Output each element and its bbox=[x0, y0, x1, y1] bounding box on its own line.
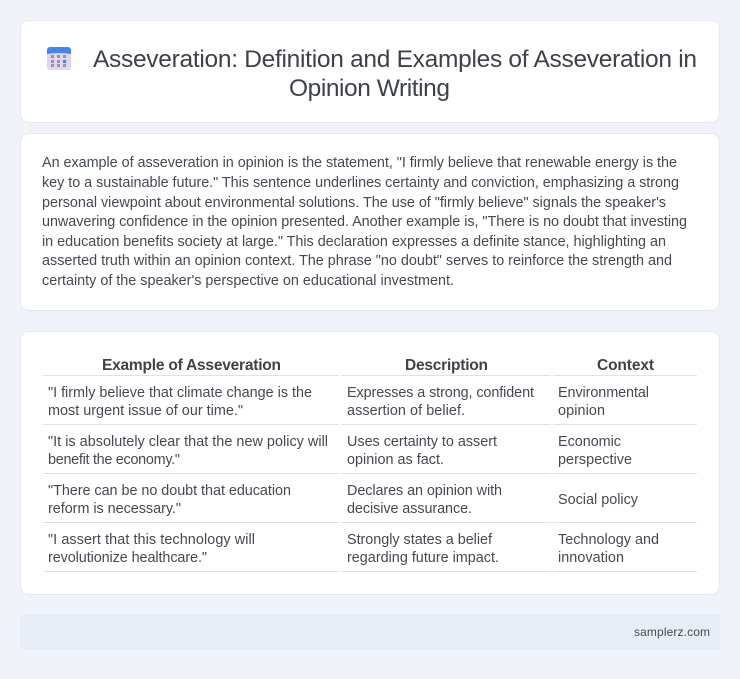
table row 2: "It is absolutely clear that the new policy will bbox=[48, 434, 328, 450]
table header bbox=[102, 357, 654, 374]
table row 1: "I firmly believe that climate change is the bbox=[48, 385, 312, 401]
table row 4: innovation bbox=[558, 550, 624, 566]
text block: paragraph bbox=[42, 155, 687, 289]
text block: paragraph: key to a sustainable future." This sentence underlines certainty and conviction, emphasizing a strong bbox=[42, 175, 679, 191]
heading: Asseveration: Definition and Examples of Asseveration in bbox=[93, 46, 697, 73]
table row 2: perspective bbox=[558, 452, 632, 468]
table row 1: Expresses a strong, confident bbox=[347, 385, 534, 401]
text block: paragraph: asserted truth within an opinion context. The phrase "no doubt" serves to reinforce the strength and bbox=[42, 253, 672, 269]
table row 3 bbox=[48, 483, 639, 517]
heading bbox=[93, 46, 697, 102]
table header: Context bbox=[597, 357, 654, 374]
text block: paragraph: An example of asseveration in opinion is the statement, "I firmly believe that renewable energy is the bbox=[42, 155, 677, 171]
text block: paragraph: personal viewpoint about environmental solutions. The use of "firmly believe" signals the speaker's bbox=[42, 195, 666, 211]
table row 1: most urgent issue of our time." bbox=[48, 403, 243, 419]
table row 3: Declares an opinion with bbox=[347, 483, 502, 499]
text block: paragraph: in education benefits society at large." This declaration expresses a definite stance, highlighting an bbox=[42, 234, 666, 250]
table header: Description bbox=[405, 357, 488, 374]
table row 2: opinion as fact. bbox=[347, 452, 444, 468]
table row 3: decisive assurance. bbox=[347, 501, 472, 517]
table row 3: "There can be no doubt that education bbox=[48, 483, 291, 499]
table row 2: benefit the economy." bbox=[48, 452, 180, 468]
panel: introduction text bbox=[20, 134, 720, 310]
table row 4: revolutionize healthcare." bbox=[48, 550, 207, 566]
table row 4: Strongly states a belief bbox=[347, 532, 493, 548]
panel: title card bbox=[20, 20, 720, 122]
table row 1 bbox=[48, 385, 649, 419]
table row 3: reform is necessary." bbox=[48, 501, 181, 517]
table header: Example of Asseveration bbox=[102, 357, 281, 374]
footer bar: samplerz.com bbox=[634, 625, 710, 639]
table row 4: "I assert that this technology will bbox=[48, 532, 255, 548]
table row 1: assertion of belief. bbox=[347, 403, 465, 419]
icon: calendar bbox=[47, 47, 71, 70]
heading: Opinion Writing bbox=[289, 75, 450, 102]
text block: paragraph: certainty of the speaker's perspective on educational investment. bbox=[42, 273, 454, 289]
table row 4: Technology and bbox=[558, 532, 659, 548]
table row 4: regarding future impact. bbox=[347, 550, 499, 566]
table row 3: Social policy bbox=[558, 492, 639, 508]
footer bar bbox=[20, 615, 720, 649]
table row 2 bbox=[48, 434, 632, 468]
table row 2: Economic bbox=[558, 434, 621, 450]
table row 2: Uses certainty to assert bbox=[347, 434, 497, 450]
text block: paragraph: unwavering confidence in the opinion presented. Another example is, "There is no doubt that investing bbox=[42, 214, 687, 230]
table row 1: opinion bbox=[558, 403, 605, 419]
table row 4 bbox=[48, 532, 659, 566]
panel: examples table bbox=[20, 332, 720, 594]
table row 1: Environmental bbox=[558, 385, 649, 401]
